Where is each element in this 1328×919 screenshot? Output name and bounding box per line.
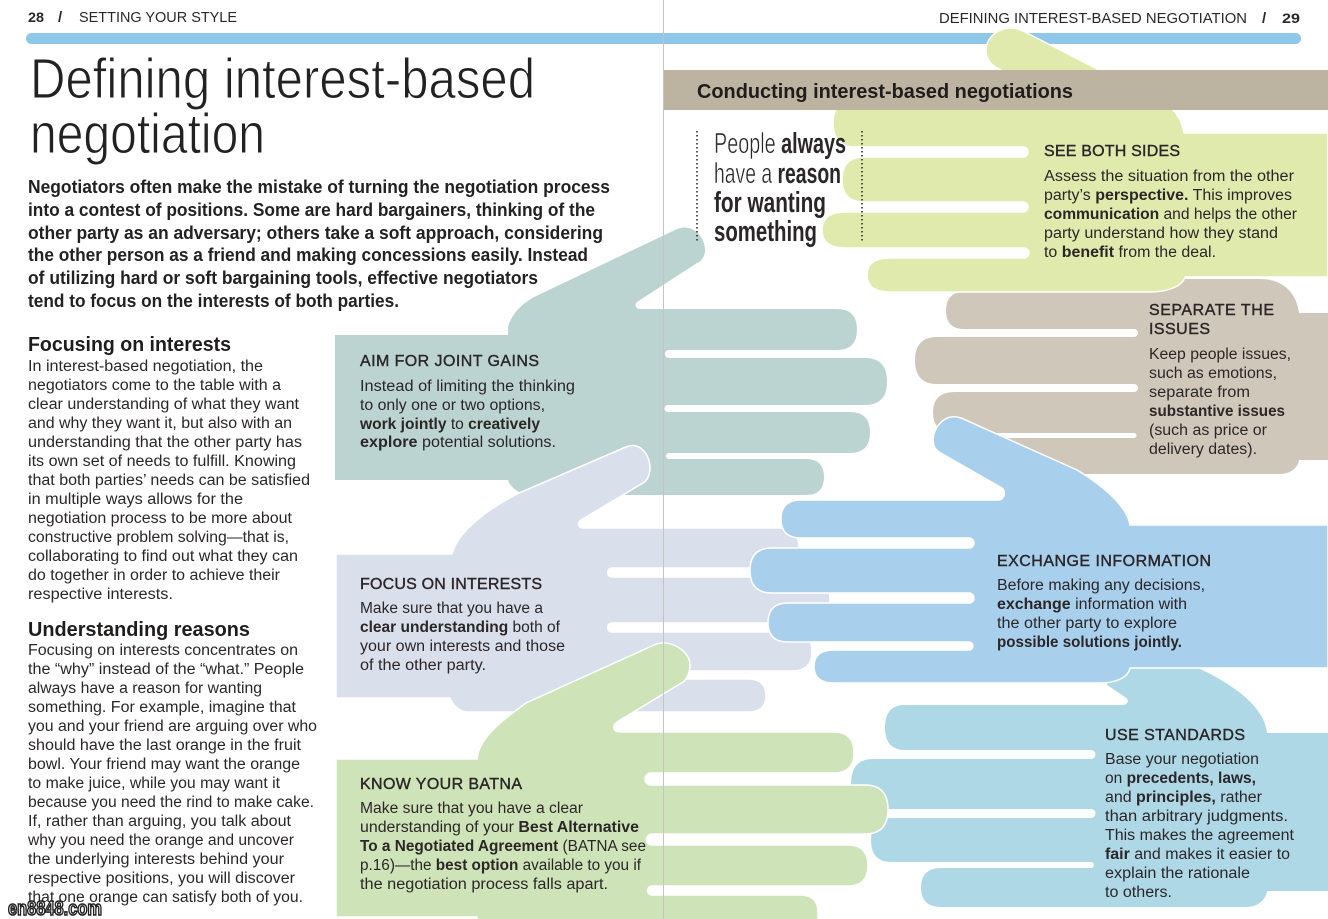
running header left: SETTING YOUR STYLE (79, 10, 237, 26)
body text: see both sides: to benefit from the deal. (1044, 244, 1216, 261)
pull quote: for wanting (714, 187, 826, 219)
body text: understanding reasons: to make juice, while you may want it (28, 775, 281, 792)
body text: understanding reasons: the underlying interests behind your (28, 851, 284, 868)
title (30, 47, 535, 166)
body text: use standards: to others. (1105, 884, 1172, 901)
body text: separate the issues (1149, 346, 1291, 458)
hand: light green (336, 643, 888, 919)
hand: blue (750, 417, 1328, 683)
body text: understanding reasons: why you need the orange and uncover (27, 832, 294, 849)
hand: light blue (851, 640, 1328, 907)
body text: understanding reasons (27, 642, 317, 906)
body text: separate the issues: delivery dates). (1149, 441, 1257, 458)
title: negotiation (30, 102, 265, 166)
body text: separate the issues: separate from (1149, 384, 1250, 401)
body text: see both sides: party understand how they stand (1044, 225, 1278, 242)
body text: use standards: fair and makes it easier to (1105, 846, 1290, 863)
body text: understanding reasons: because you need the rind to make cake. (28, 794, 314, 811)
heading: separate the issues: SEPARATE THE (1149, 302, 1274, 319)
hand: lavender (336, 446, 830, 712)
body text: focusing on interests: and why they want it, but also with an (28, 415, 292, 432)
body text: exchange information (997, 577, 1205, 651)
intro paragraph: into a contest of positions. Some are hard bargainers, thinking of the (28, 200, 595, 220)
hand: tan (915, 279, 1328, 474)
body text: aim for joint gains: to only one or two options, (360, 397, 545, 414)
body text: use standards: on precedents, laws, (1105, 770, 1256, 787)
body text: know your batna: Make sure that you have a clear (360, 800, 583, 817)
intro paragraph (28, 177, 610, 311)
heading: know your batna: KNOW YOUR BATNA (360, 776, 522, 793)
heading: focus on interests: FOCUS ON INTERESTS (360, 576, 542, 593)
body text: separate the issues: (such as price or (1149, 422, 1267, 439)
body text: focus on interests: your own interests and those (360, 638, 565, 655)
body text: separate the issues: Keep people issues, (1149, 346, 1291, 363)
running header right: DEFINING INTEREST-BASED NEGOTIATION (939, 11, 1247, 27)
body text: use standards: explain the rationale (1105, 865, 1250, 882)
body text: focus on interests: clear understanding both of (360, 619, 561, 636)
body text: exchange information: the other party to explore (997, 615, 1177, 632)
body text: focusing on interests: in multiple ways allows for the (28, 491, 243, 508)
body text: see both sides: communication and helps the other (1044, 206, 1297, 223)
body text: know your batna: p.16)—the best option available to you if (360, 857, 642, 874)
panel: see both sides (822, 28, 1328, 292)
body text: focus on interests: of the other party. (360, 657, 486, 674)
intro paragraph: of utilizing hard or soft bargaining tools, effective negotiators (28, 268, 538, 288)
body text: use standards: and principles, rather (1105, 789, 1262, 806)
body text: use standards: This makes the agreement (1105, 827, 1295, 844)
heading: separate the issues (1149, 302, 1274, 338)
body text: focusing on interests (28, 358, 310, 603)
body text: see both sides (1044, 168, 1297, 261)
body text: know your batna: To a Negotiated Agreement (BATNA see (360, 838, 646, 855)
body text: exchange information: exchange information with (997, 596, 1187, 613)
body text: exchange information: possible solutions jointly. (997, 634, 1182, 651)
intro paragraph: Negotiators often make the mistake of turning the negotiation process (28, 177, 610, 197)
panel: exchange information (750, 417, 1328, 683)
pull quote (697, 128, 862, 248)
heading: use standards: USE STANDARDS (1105, 727, 1245, 744)
body text: focusing on interests: collaborating to find out what they can (28, 548, 298, 565)
panel: know your batna (336, 643, 888, 919)
body text: know your batna (360, 800, 646, 893)
body text: understanding reasons: If, rather than arguing, you talk about (28, 813, 292, 830)
band: conducting interest-based negotiations (664, 70, 1328, 110)
body text: focusing on interests: constructive problem solving—that is, (28, 529, 289, 546)
body text: separate the issues: such as emotions, (1149, 365, 1277, 382)
body text: focusing on interests: In interest-based negotiation, the (28, 358, 263, 375)
intro paragraph: the other person as a friend and making concessions easily. Instead (28, 245, 588, 265)
body text: separate the issues: substantive issues (1149, 403, 1285, 420)
body text: see both sides: Assess the situation from the other (1044, 168, 1294, 185)
hand: teal (335, 228, 887, 495)
body text: focusing on interests: clear understanding of what they want (28, 396, 300, 413)
pull quote: something (714, 216, 817, 248)
body text: use standards (1105, 751, 1295, 901)
panel: focus on interests (336, 446, 830, 712)
pull quote: People always (714, 128, 846, 160)
body text: focusing on interests: negotiators come to the table with a (28, 377, 281, 394)
blue header bar (26, 33, 1301, 44)
heading: separate the issues: ISSUES (1149, 321, 1210, 338)
body text: see both sides: party’s perspective. This improves (1044, 187, 1292, 204)
intro paragraph: other party as an adversary; others take a soft approach, considering (28, 223, 603, 243)
body text: use standards: than arbitrary judgments. (1105, 808, 1288, 825)
body text: focusing on interests: that both parties’ needs can be satisfied (28, 472, 310, 489)
body text: aim for joint gains (359, 378, 575, 451)
heading: see both sides: SEE BOTH SIDES (1044, 143, 1180, 160)
body text: understanding reasons: you and your friend are arguing over who (28, 718, 317, 735)
running header left: / (58, 9, 63, 26)
body text: focusing on interests: negotiation process to be more about (28, 510, 293, 527)
panel: aim for joint gains (335, 228, 887, 495)
heading: understanding reasons: Understanding reasons (28, 619, 250, 641)
heading: aim for joint gains: AIM FOR JOINT GAINS (360, 353, 539, 370)
body text: understanding reasons: that one orange can satisfy both of you. (28, 889, 303, 906)
intro paragraph: tend to focus on the interests of both parties. (28, 291, 399, 311)
pull quote: have a reason (714, 158, 841, 190)
body text: focusing on interests: its own set of needs to fulfill. Knowing (28, 453, 296, 470)
body text: know your batna: understanding of your Best Alternative (360, 819, 639, 836)
title: Defining interest-based (30, 47, 535, 111)
section: understanding reasons (27, 619, 317, 906)
running header right: / (1262, 10, 1267, 27)
running header left: 28 (28, 9, 44, 25)
band: conducting interest-based negotiations: Conducting interest-based negotiations (697, 81, 1073, 103)
body text: aim for joint gains: work jointly to creatively (359, 416, 540, 433)
body text: focusing on interests: respective interests. (28, 586, 173, 603)
body text: know your batna: the negotiation process falls apart. (360, 876, 608, 893)
body text: understanding reasons: the “why” instead of the “what.” People (28, 661, 304, 678)
heading: focusing on interests: Focusing on interests (28, 334, 231, 356)
body text: understanding reasons: Focusing on interests concentrates on (28, 642, 298, 659)
heading: exchange information: EXCHANGE INFORMATION (997, 553, 1211, 570)
body text: focus on interests: Make sure that you have a (360, 600, 543, 617)
section: focusing on interests (28, 334, 310, 603)
body text: use standards: Base your negotiation (1105, 751, 1259, 768)
body text: aim for joint gains: Instead of limiting the thinking (360, 378, 575, 395)
body text: focus on interests (360, 600, 565, 674)
body text: understanding reasons: bowl. Your friend may want the orange (28, 756, 300, 773)
panel: use standards (851, 640, 1328, 907)
panel: separate the issues (915, 279, 1328, 474)
hand: lime green (822, 28, 1328, 292)
body text: understanding reasons: should have the last orange in the fruit (28, 737, 302, 754)
body text: focusing on interests: do together in order to achieve their (28, 567, 280, 584)
body text: exchange information: Before making any decisions, (997, 577, 1205, 594)
body text: understanding reasons: always have a reason for wanting (28, 680, 262, 697)
body text: aim for joint gains: explore potential solutions. (360, 434, 556, 451)
body text: understanding reasons: something. For example, imagine that (28, 699, 297, 716)
running header right: 29 (1282, 10, 1300, 26)
body text: focusing on interests: understanding that the other party has (28, 434, 302, 451)
body text: understanding reasons: respective positions, you will discover (28, 870, 295, 887)
